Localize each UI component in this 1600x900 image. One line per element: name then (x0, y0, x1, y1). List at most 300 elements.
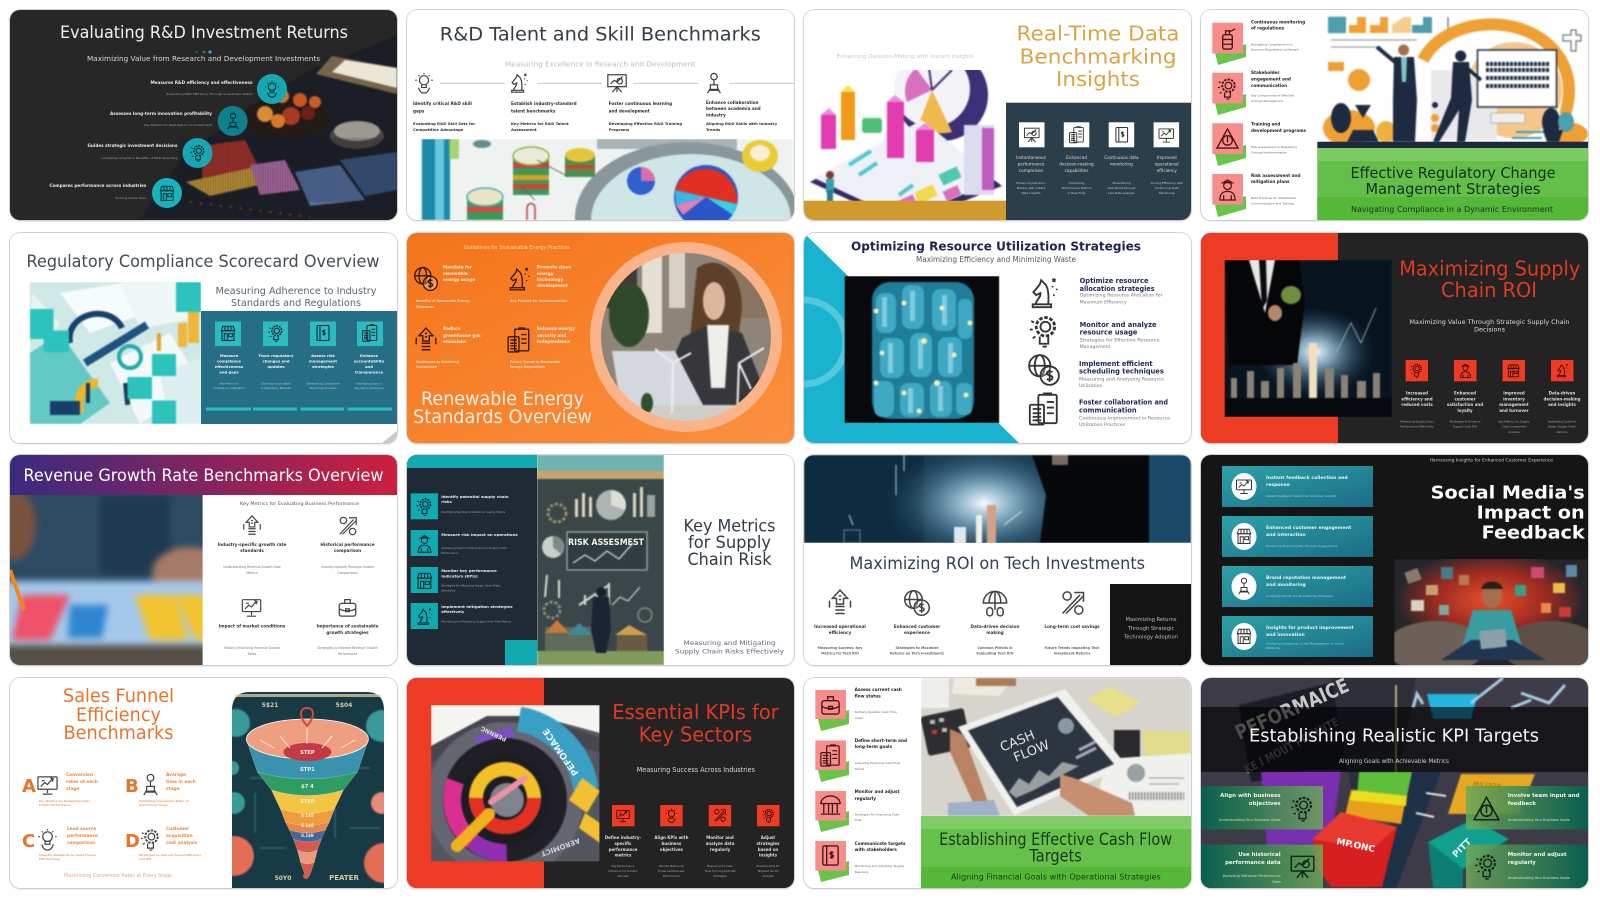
dial labels (479, 724, 581, 857)
scorecard details: Regulatory Adherence (354, 386, 384, 390)
scorecard labels: changes and (262, 358, 290, 363)
item: comparison: Scoring Guide Here (115, 196, 147, 200)
item D: and ROI (139, 856, 151, 860)
feature labels: management (1499, 402, 1529, 406)
item: profitability: Key Metrics for R&D Return on Investment (144, 123, 213, 127)
subtitle: Supply Chain Risks Effectively (675, 648, 784, 656)
icon tiles (612, 804, 780, 826)
feature details: Targeted Sector (756, 868, 779, 872)
icon and metric: market conditions: Factors Influencing Revenue Growth (224, 646, 280, 650)
feature details: Driving Efficiency with (1151, 181, 1183, 185)
dark callout: Through Strategic (1127, 626, 1174, 632)
scorecard details: Key Metrics in (220, 381, 239, 385)
funnel rim (246, 718, 368, 760)
item: emissions: Challenges in Achieving (416, 360, 460, 364)
icon and metric: sustainable growth: growth strategies (326, 630, 369, 635)
illustration: 3D KPI blocks (1231, 673, 1565, 888)
benefit labels: efficiency (829, 630, 851, 635)
item: assess (815, 686, 902, 730)
scorecard labels: updates (267, 364, 285, 368)
feature labels: Enhanced (1454, 390, 1476, 395)
block labels: MP.ONC (1335, 837, 1376, 855)
feature details: Data Insights (1021, 191, 1041, 195)
feature labels: customer (1454, 396, 1476, 401)
title: Renewable Energy (421, 388, 584, 410)
scorecard details (213, 381, 384, 390)
item: mitigation: effectively (441, 609, 465, 614)
subtitle (1410, 318, 1570, 333)
callout: business objectives: objectives (1249, 800, 1281, 806)
funnel step labels: STEP (300, 798, 315, 804)
scorecard labels: Assess risk (311, 352, 335, 358)
photo: businessman above city skyline (1224, 260, 1392, 417)
item: mitigation (411, 603, 513, 629)
feature labels: insights (759, 852, 778, 857)
poster labels: 5$21 (262, 702, 278, 708)
item: monitor: Strategies for Improving Cash (855, 812, 900, 816)
item: scheduling: scheduling techniques (1079, 367, 1164, 375)
panel: Maximizing ROI on Tech Investments (804, 455, 1191, 665)
item: instant feedback: response (1266, 482, 1290, 488)
item: risk: mitigation plans (1251, 179, 1290, 184)
icons row (415, 73, 720, 93)
item: reputation: and monitoring (1266, 582, 1306, 588)
item B: Each Funnel Stage (139, 802, 168, 806)
item: mitigation: Implement mitigation strategies (441, 604, 513, 609)
scorecard details: & Regulatory Reviews (261, 386, 291, 390)
feature details: Supply Chain ROI (1453, 424, 1477, 428)
item: stakeholders: communication (1251, 83, 1287, 88)
panel: Essential KPIs for Key Sectors (407, 678, 794, 888)
item: emissions: emissions (443, 338, 467, 344)
item: emissions: Compliance (416, 364, 437, 368)
title: Optimizing Resource Utilization Strategies (851, 238, 1141, 253)
callout: historical data: performance data (1225, 860, 1281, 866)
feature labels: objectives (660, 846, 684, 852)
item: monitoring: Strategies for Effective Resource (1080, 337, 1160, 343)
illustration: sales funnel poster (214, 692, 404, 888)
subtitle: Maximizing Value from Research and Development Investments (87, 55, 320, 63)
scorecard labels: management (309, 358, 337, 363)
feature details: Performance (663, 874, 680, 878)
icon and metric: industry standards: Metrics (246, 571, 258, 575)
item: product insights (1222, 616, 1373, 657)
panel: Social Media's Impact on Feedback (1201, 455, 1588, 665)
red side band (407, 678, 544, 888)
item: define: Trends (854, 766, 865, 770)
item: mandates: Standards (416, 304, 435, 308)
feature details: Performance Metrics (1062, 186, 1092, 190)
icon and metric: historical: comparison (334, 548, 361, 553)
feature details: Live Data Analysis (1108, 191, 1135, 195)
item: engagement (1222, 516, 1373, 557)
item: security: security and (537, 332, 566, 338)
feature labels: efficiency and (1401, 396, 1433, 401)
item: instant feedback (1222, 466, 1373, 507)
item C (22, 826, 98, 860)
benefit details (818, 646, 1100, 656)
item: KPIs: Effectively (441, 588, 456, 592)
icon and metric: industry standards: standards (240, 548, 264, 553)
item: efficiency: Measures R&D efficiency and effectiveness (150, 80, 253, 85)
callout: team input: feedback (1508, 800, 1536, 806)
item: collaboration: communication (1079, 406, 1137, 414)
feature details: Continuous Data (1155, 186, 1179, 190)
icon and metric: historical: Historical performance (320, 542, 375, 547)
benefit details: Evaluating Tech ROI (977, 652, 1013, 656)
title: Real-Time Data (1016, 22, 1180, 46)
scorecard labels: Measure (220, 352, 239, 358)
scorecard labels: compliance (217, 358, 242, 363)
column: talent benchmarks: Key Metrics for R&D Talent (511, 121, 569, 126)
callout: monitor: Understanding Your Business Goals (1508, 876, 1570, 880)
icon and metric: sustainable growth (317, 600, 379, 656)
item: communicate: Monitoring and Adjusting Targets (855, 864, 904, 868)
item: scheduling: Utilization (1079, 382, 1103, 388)
photo: man with tablet amid social media images (1394, 559, 1588, 665)
scorecard labels: effectiveness (215, 364, 244, 368)
icons row (830, 590, 1084, 616)
dark callout: Technology Adoption (1123, 634, 1178, 640)
tablet label (998, 728, 1052, 765)
dial labels: PERNNC (479, 724, 508, 742)
subtitle: Guidelines for Sustainable Energy Practices (464, 244, 570, 250)
item D: cost analysis (166, 840, 198, 846)
title: Effective Regulatory Change (1350, 164, 1556, 182)
feature labels: Align KPIs with (654, 834, 689, 840)
item: scheduling: Implement efficient (1079, 360, 1153, 368)
feature labels: strategies (757, 840, 780, 846)
item: assess: Goals (855, 716, 863, 720)
item: scheduling (1029, 355, 1164, 388)
benefit labels: making (986, 630, 1004, 635)
item D: acquisition (166, 832, 193, 838)
dial labels: PEFOMACE (542, 726, 581, 777)
subtitle: Maximizing Efficiency and Minimizing Waste (916, 254, 1076, 264)
feature details: Analysis (1508, 430, 1520, 434)
title: Benchmarks (64, 722, 174, 744)
item: identify risks (411, 493, 509, 519)
red side band (1201, 232, 1338, 442)
funnel step labels (300, 750, 315, 838)
item: allocation: Maximum Efficiency (1080, 299, 1127, 305)
item: define: Analyzing Historical Cash Flow (855, 760, 901, 764)
subtitle: Measuring Success Across Industries (637, 766, 755, 774)
photo: hand using cash flow tablet on desk (921, 678, 1191, 816)
item: measure impact (411, 530, 518, 556)
item: training: Change Implementation (1251, 151, 1287, 155)
feature labels: Enhanced (1066, 155, 1087, 160)
benefit details: Future Trends Impacting Tech (1044, 646, 1100, 650)
item: product insights: Insights for product improvement (1266, 625, 1355, 631)
feature details (1400, 419, 1577, 434)
feature details: Enhancing Decision- (1016, 181, 1046, 185)
feature labels: satisfaction and (1447, 402, 1483, 406)
icon tiles (1019, 122, 1179, 147)
column: talent benchmarks: Establish industry-standard (511, 101, 577, 106)
item C: Industry Standards for Sales Funnel (39, 852, 96, 856)
feature labels: Increased (1406, 390, 1428, 395)
icon and metric: historical: Industry-Specific Revenue Growth (321, 565, 374, 569)
callout: team input: Understanding Your Business Goals (1508, 818, 1570, 822)
feature details: Success (618, 874, 629, 878)
item: assess: flow status (855, 693, 881, 698)
column: collaboration: industry (706, 112, 726, 118)
feature details: Making with Instant (1017, 186, 1046, 190)
illustration: risk assessment chalkboard (537, 455, 664, 665)
subtitle: Measuring and Mitigating (684, 640, 776, 647)
feature details: Optimizing Costs for (1548, 419, 1577, 423)
item C: Effectiveness (39, 856, 60, 860)
title: Essential KPIs for (612, 700, 779, 724)
feature details: Performance Effectively (1400, 424, 1434, 428)
item: risk (1212, 173, 1300, 217)
feature details: Better Supply Chain (1548, 424, 1576, 428)
item: security: Enhance energy (537, 326, 575, 330)
column: learning (609, 101, 682, 132)
feature details: Key Performance (612, 864, 635, 868)
item: strategy (88, 138, 212, 168)
title (63, 684, 174, 744)
panel: Sales Funnel Efficiency Benchmarks (10, 678, 397, 888)
title: R&D Talent and Skill Benchmarks (440, 24, 761, 46)
icon and metric: historical (320, 517, 375, 575)
item: KPIs: Strategies for Mitigating Supply Chain Risks (441, 584, 501, 588)
subtitle: Navigating Compliance in a Dynamic Environment (1351, 205, 1553, 214)
subtitle: Measuring Excellence in Research and Development (505, 60, 695, 68)
column: skill gaps: Evaluating R&D Skill Sets for (413, 121, 475, 126)
scorecard labels: Track regulatory (258, 352, 294, 358)
dark title band (1201, 706, 1588, 772)
icon glyphs (1410, 364, 1568, 377)
feature labels: analyze data (706, 840, 735, 846)
item B: Optimizing Conversion Rates at (139, 798, 189, 802)
item C: Lead source (67, 826, 96, 832)
icon and metric: sustainable growth: Performance (338, 652, 357, 656)
photo: colored stacks and pie chart dish (419, 139, 794, 220)
item B: B (125, 776, 139, 796)
photo: blurred bar chart and pencil (10, 495, 203, 665)
icon glyphs (1024, 127, 1174, 143)
item: identify risks: Identifying Key Risk Indicators in Supply Chains (441, 510, 506, 514)
item: monitoring: Navigating Compliance in a (1251, 42, 1293, 46)
title: Efficiency (76, 704, 161, 726)
feature labels: Define industry- (605, 834, 642, 840)
item A: stage (66, 786, 80, 792)
block labels: MILLION (1473, 781, 1501, 789)
item A: rates at each (66, 778, 98, 784)
scorecard details: Compliance Adaptation (213, 386, 245, 390)
poster labels (262, 702, 359, 882)
item: allocation (1033, 276, 1163, 307)
block labels: PITT (1451, 836, 1475, 860)
item: measure impact: Measure risk impact on operations (441, 532, 518, 537)
feature labels: decision-making (1544, 396, 1581, 401)
column: talent benchmarks (511, 101, 577, 132)
callout: team input (1466, 786, 1588, 829)
item: training: Risk Assessment in Regulatory (1251, 145, 1297, 149)
item: measure impact: Assessing Impact of Disruptions on Supply Chain (441, 546, 507, 550)
item: collaboration: Foster collaboration and (1079, 398, 1168, 406)
title: Management Strategies (1366, 180, 1540, 198)
feature labels: and turnover (1499, 408, 1529, 412)
block labels: KE I MOUT PROMITE (1242, 714, 1341, 776)
item: stakeholders: Key Components of Effective (1251, 94, 1294, 98)
subtitle: Aligning Goals with Achievable Metrics (1339, 758, 1449, 764)
callout: historical data (1201, 844, 1323, 888)
item A: Conversion (66, 772, 93, 778)
column: learning: Developing Effective R&D Training (609, 121, 682, 126)
item: security: Future Trends in Renewable (510, 360, 560, 364)
title: Insights (1056, 67, 1140, 91)
item: emissions: Reduce (443, 326, 461, 330)
feature labels: Adjust (761, 834, 775, 840)
benefit labels: experience (904, 630, 930, 635)
subtitle (675, 640, 784, 656)
callout: business objectives: Align with business (1220, 792, 1281, 798)
item: monitoring: Continuous monitoring (1251, 19, 1305, 24)
feature labels: specific (614, 840, 632, 846)
item: identify risks: Identify potential supply chain (441, 494, 509, 499)
item: emissions: greenhouse gas (443, 332, 481, 338)
title: Impact on (1477, 502, 1585, 523)
illustration: team at dashboard (1322, 16, 1588, 142)
feature labels: regularly (710, 846, 731, 852)
illustration: performance dial (431, 705, 600, 862)
callout: monitor: regularly (1508, 860, 1536, 866)
item: engagement: and interaction (1266, 532, 1306, 538)
funnel bands (246, 740, 368, 876)
subtitle: Decisions (1474, 325, 1506, 333)
column: skill gaps: Identify critical R&D skill (413, 101, 472, 106)
item: mandates (415, 264, 475, 308)
panel: Establishing Effective Cash Flow Targets (804, 678, 1191, 888)
title (1399, 256, 1580, 302)
item: risk: Communication and Training (1251, 202, 1294, 206)
score bars (206, 407, 392, 410)
feature labels: comparison (1019, 168, 1044, 173)
title: Evaluating R&D Investment Returns (60, 23, 348, 42)
item: assess: Defining Realistic Cash Flow (855, 710, 897, 714)
item: measure impact: Performance (441, 551, 459, 555)
item: security: Energy Regulations (510, 364, 545, 368)
item: KPIs: Monitor key performance (441, 568, 497, 573)
feature details: Measuring Success: (707, 864, 733, 868)
column: learning: Programs (609, 127, 630, 132)
item D: Strategies to Improve Funnel Efficiency (139, 852, 201, 856)
column: collaboration: Trends (706, 127, 721, 132)
illustration: isometric compliance (30, 282, 201, 424)
item B (125, 772, 196, 806)
feature labels: metrics (615, 852, 632, 857)
scorecard labels: strategies (312, 364, 335, 368)
dial labels: AEROMICT (540, 836, 581, 857)
icon glyphs (221, 324, 377, 341)
feature labels: Monitor and (706, 834, 734, 840)
feature labels: monitoring (1110, 162, 1133, 166)
benefit labels (814, 624, 1100, 635)
feature details: Tools for Long-term KPI (704, 868, 736, 872)
feature details: Streamlining (1112, 181, 1131, 185)
scorecard labels: Enhance (360, 352, 378, 358)
icon and metric: market conditions: Impact of market conditions (219, 624, 286, 628)
accent dots (196, 50, 212, 54)
scorecard labels: accountability (354, 358, 385, 363)
title: Standards Overview (413, 406, 592, 428)
item: product insights: Analyzing Complaints: Crisis Management on Social (1266, 642, 1344, 646)
title (612, 700, 779, 746)
column: skill gaps (413, 101, 475, 132)
item: define: long-term goals (855, 744, 892, 748)
item: clean technology: Promote clean (537, 264, 571, 269)
item: allocation: Optimizing Resource Allocation for (1080, 292, 1163, 298)
feature labels: decision-making (1059, 162, 1094, 166)
column: collaboration: Aligning R&D Skills with Industry (706, 121, 778, 126)
dark feature panel (1006, 103, 1191, 220)
funnel step labels: STP1 (300, 766, 315, 772)
feature details: in Real-Time (1068, 191, 1086, 195)
column: collaboration: between academia and (706, 106, 761, 111)
item B: stage (166, 786, 180, 792)
item C: C (22, 830, 35, 852)
item: communicate: Communicate targets (855, 840, 906, 846)
title: for Supply (688, 533, 771, 552)
title: Establishing Realistic KPI Targets (1249, 726, 1539, 746)
item: monitoring: of regulations (1251, 26, 1285, 31)
callout: team input: Involve team input and (1508, 792, 1580, 798)
poster labels: 5$04 (336, 702, 352, 708)
callout: historical data: Analyzing Historical Performance (1223, 874, 1281, 878)
benefit details: Investment Returns (1054, 652, 1090, 656)
scorecard details: Identifying Gaps in (356, 381, 382, 385)
callout: historical data: Data (1272, 880, 1281, 884)
icon glyphs (617, 808, 773, 822)
feature details: Operations through (1107, 186, 1136, 190)
item: assess: Assess current cash (855, 686, 902, 692)
feature labels: Instantaneous (1016, 155, 1046, 160)
item: comparison (49, 178, 182, 208)
title: Sales Funnel (63, 684, 174, 706)
subtitle (216, 286, 377, 308)
item: profitability: Assesses long-term innovation profitability (110, 111, 212, 116)
benefit labels: Enhanced customer (894, 624, 941, 629)
icon and metric: industry standards: Industry-specific growth rate (218, 542, 287, 547)
feature labels: Continuous data (1104, 155, 1139, 160)
feature details: Enhanced Business (658, 868, 685, 872)
item: communicate: with stakeholders (855, 846, 897, 852)
item: define: Define short-term and (855, 738, 907, 742)
item: clean technology: development (537, 282, 568, 288)
scorecard panel (201, 310, 397, 424)
item: reputation: Analyzing Trends: Social Listening Strategies (1266, 594, 1333, 598)
item: identify risks: risks (441, 499, 452, 504)
feature details: Chain Investment (1502, 424, 1527, 428)
icon tiles (215, 321, 383, 346)
item C: comparison (67, 840, 95, 846)
item A: Key Metrics for Evaluating Sales (39, 798, 90, 802)
item: comparison: Compares performance across industries (49, 183, 147, 188)
title (684, 517, 776, 569)
panel: Regulatory Compliance Scorecard Overview (10, 232, 397, 442)
item: define (815, 738, 907, 782)
item: stakeholders: engagement and (1251, 77, 1291, 82)
icon and metric: historical: Comparisons (337, 571, 358, 575)
panel: Real-Time Data Benchmarking Insights (804, 10, 1191, 220)
column: learning: and development (609, 108, 650, 113)
scorecard labels: and gaps (219, 369, 240, 374)
icon and metric: industry standards (218, 516, 287, 575)
item: mandates: Mandate for (443, 264, 473, 269)
